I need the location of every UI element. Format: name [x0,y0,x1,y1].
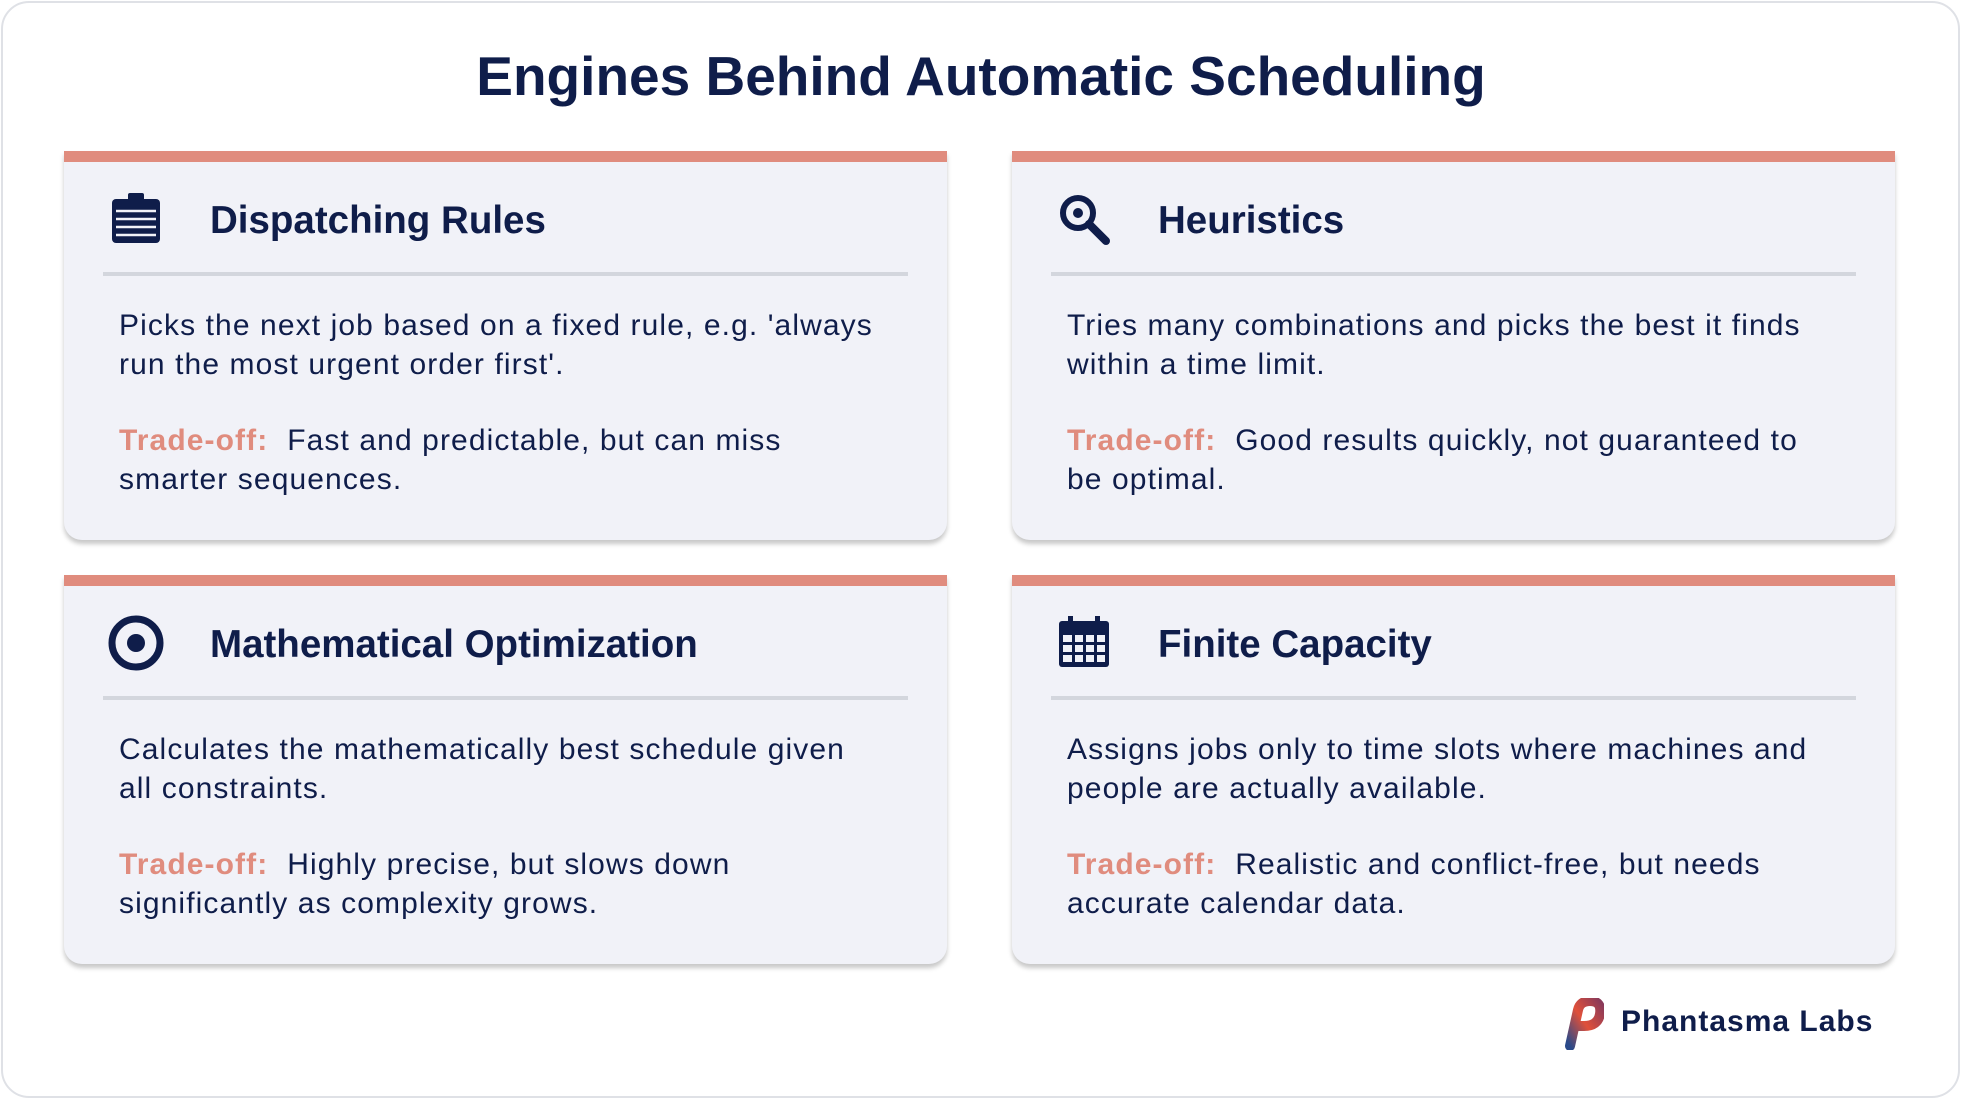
description [1067,733,1807,805]
description [119,309,873,381]
panel: heuristics [1012,151,1895,540]
description: Calculates the mathematically best schedule given [119,733,845,766]
trade-off [1067,848,1761,920]
description: within a time limit. [1067,348,1326,381]
description: people are actually available. [1067,772,1487,805]
trade-off: Trade-off: Good results quickly, not guaranteed to [1067,424,1798,457]
trade-off: Trade-off: Fast and predictable, but can miss [119,424,782,457]
trade-off: be optimal. [1067,463,1226,496]
panel: dispatching rules [64,151,947,540]
trade-off [119,848,730,920]
trade-off [119,424,782,496]
heading: Finite Capacity [1158,623,1432,666]
description [1067,309,1801,381]
trade-off: accurate calendar data. [1067,887,1406,920]
trade-off: Trade-off: Highly precise, but slows down [119,848,730,881]
heading: Heuristics [1158,199,1344,242]
heading: Dispatching Rules [210,199,546,242]
logo: Phantasma Labs [1565,998,1873,1050]
description: run the most urgent order first'. [119,348,565,381]
panel: finite capacity [1012,575,1895,964]
icon: clipboard list [112,193,160,243]
description: Tries many combinations and picks the best it finds [1067,309,1801,342]
icon: target [108,616,164,670]
heading: Mathematical Optimization [210,623,698,666]
trade-off: Trade-off: Realistic and conflict-free, but needs [1067,848,1761,881]
icon: magnifier [1060,195,1110,245]
description [119,733,845,805]
title: Engines Behind Automatic Scheduling [476,45,1486,107]
logo: Phantasma Labs: Phantasma Labs [1621,1005,1873,1038]
trade-off [1067,424,1798,496]
trade-off: significantly as complexity grows. [119,887,598,920]
description: Assigns jobs only to time slots where machines and [1067,733,1807,766]
icon: calendar [1059,616,1109,667]
description: all constraints. [119,772,328,805]
trade-off: smarter sequences. [119,463,402,496]
panel: mathematical optimization [64,575,947,964]
description: Picks the next job based on a fixed rule, e.g. 'always [119,309,873,342]
